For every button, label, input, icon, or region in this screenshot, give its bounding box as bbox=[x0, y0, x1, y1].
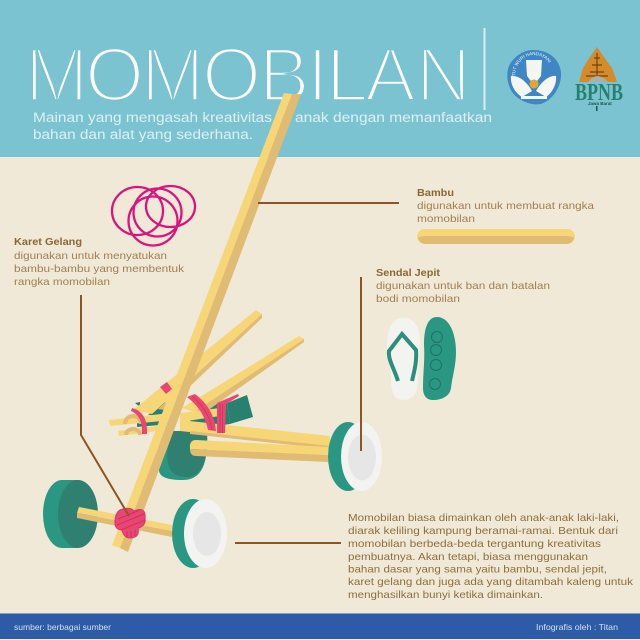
header divider bbox=[484, 28, 486, 110]
text: description paragraph: Momobilan biasa dimainkan oleh anak-anak laki-laki, bbox=[348, 512, 619, 524]
text: Sendal Jepit: bodi momobilan bbox=[376, 293, 460, 305]
header band bbox=[0, 0, 640, 157]
icon: flip-flop top bbox=[387, 318, 420, 400]
text: Bambu bbox=[417, 187, 594, 225]
footer credit: Infografis oleh : Titan bbox=[536, 622, 618, 632]
text: Sendal Jepit bbox=[376, 267, 550, 305]
logo: Tut Wuri Handayani: TUT WURI HANDAYANI bbox=[512, 52, 552, 76]
icon: bamboo bar bbox=[417, 229, 575, 244]
front right wheel bbox=[172, 499, 227, 568]
main bamboo stick bbox=[112, 93, 301, 552]
front left wheel bbox=[43, 480, 98, 548]
text: description paragraph bbox=[348, 512, 634, 601]
text: Karet Gelang: bambu-bambu yang membentuk bbox=[14, 263, 185, 275]
text: Bambu: momobilan bbox=[417, 213, 475, 225]
text: description paragraph: diarak keliling kampung beramai-ramai. Bentuk dari bbox=[348, 525, 618, 537]
green sandal body bbox=[135, 395, 253, 430]
logo: BPNB Jawa Barat: BPNB bbox=[575, 80, 623, 106]
text: description paragraph: bahan dasar yang sama yaitu bambu, sendal jepit, bbox=[348, 564, 607, 576]
text: description paragraph: pembuatnya. Akan tetapi, biasa menggunakan bbox=[348, 551, 588, 563]
text: description paragraph: karet gelang dan juga ada yang ditambah kaleng untuk bbox=[348, 576, 634, 588]
text: Sendal Jepit: digunakan untuk ban dan batalan bbox=[376, 280, 550, 292]
logo: BPNB Jawa Barat bbox=[575, 47, 623, 111]
text: Bambu: digunakan untuk membuat rangka bbox=[417, 200, 594, 212]
leader line: description bbox=[235, 542, 341, 544]
leader line: Bambu bbox=[258, 202, 399, 204]
rubber bands bbox=[131, 382, 239, 434]
text: Karet Gelang bbox=[14, 236, 185, 288]
rear axle bbox=[180, 420, 330, 462]
text: Sendal Jepit: Sendal Jepit bbox=[376, 267, 441, 279]
leader line: Sendal Jepit bbox=[360, 277, 362, 451]
text: Karet Gelang: digunakan untuk menyatukan bbox=[14, 250, 167, 262]
text: Karet Gelang: rangka momobilan bbox=[14, 276, 110, 288]
subtitle: anak dengan memanfaatkan bbox=[295, 110, 492, 125]
text: description paragraph: momobilan berbeda-beda tergantung kreativitas bbox=[348, 538, 601, 550]
subtitle: bahan dan alat yang sederhana. bbox=[33, 127, 253, 142]
footer bar bbox=[0, 614, 640, 639]
rubber band knot bbox=[115, 508, 145, 538]
text: Bambu: Bambu bbox=[417, 187, 454, 199]
hollow bamboo ends bbox=[125, 416, 141, 435]
leader line: Karet Gelang bbox=[81, 295, 129, 516]
title: MOMOBILAN bbox=[25, 33, 471, 118]
text: description paragraph: menghasilkan bunyi ketika dimainkan. bbox=[348, 589, 543, 601]
back left wheel bbox=[159, 431, 207, 480]
icon: flip-flop sole bbox=[423, 317, 456, 400]
footer source: sumber: berbagai sumber bbox=[14, 622, 111, 632]
logo: Tut Wuri Handayani bbox=[507, 50, 562, 104]
text: Karet Gelang: Karet Gelang bbox=[14, 236, 82, 248]
thin bamboo sticks bbox=[109, 310, 304, 436]
icon: rubber band rings bbox=[112, 186, 195, 246]
rear right wheel bbox=[328, 422, 382, 491]
subtitle: Mainan yang mengasah kreativitas bbox=[33, 110, 272, 125]
front axle bbox=[77, 507, 172, 537]
subtitle bbox=[33, 110, 492, 142]
illustration: momobilan toy bbox=[43, 93, 382, 568]
logo: BPNB Jawa Barat: Jawa Barat bbox=[588, 101, 612, 106]
